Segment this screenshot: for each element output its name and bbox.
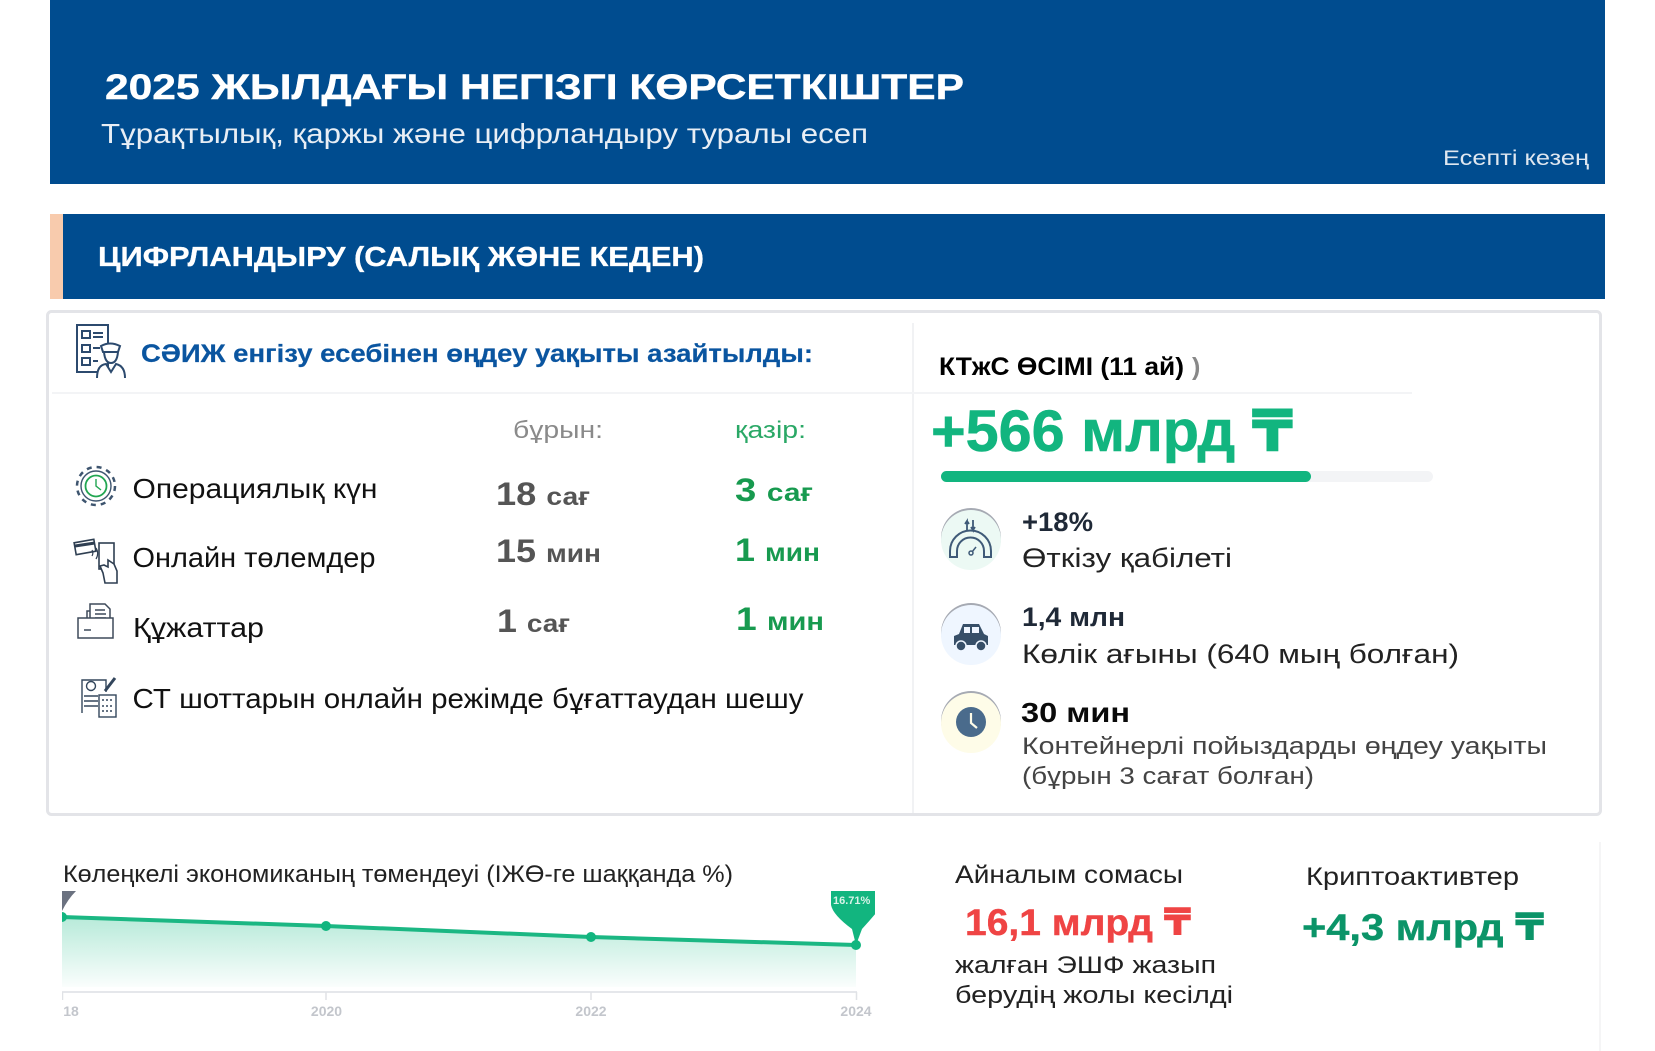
value now: 1 minute: 1 мин — [735, 532, 820, 568]
row label: operational day: Операциялық күн — [132, 473, 378, 504]
stat: traffic value: 1,4 млн — [1022, 602, 1125, 632]
stat: crypto assets: +4,3 млрд ₸ — [1302, 907, 1544, 948]
stat: turnover: 16,1 млрд ₸ — [965, 902, 1191, 943]
big number: +566 млрд ₸ — [931, 399, 1293, 464]
stat: crypto assets: Криптоактивтер — [1306, 863, 1519, 891]
x axis labels: 2022 — [575, 1003, 607, 1019]
icon: card and phone payment — [74, 539, 117, 583]
row label: online payments: Онлайн төлемдер — [132, 542, 376, 573]
title: 2025 ЖЫЛДАҒЫ НЕГІЗГІ КӨРСЕТКІШТЕР — [105, 68, 964, 107]
value now: 1 minute: 1 мин — [736, 601, 824, 637]
x axis labels — [64, 1006, 872, 1016]
header banner — [50, 0, 1605, 184]
stat: container time note: (бұрын 3 сағат болған) — [1022, 763, 1314, 790]
stat: traffic label: Көлік ағыны (640 мың болған) — [1022, 639, 1459, 669]
reporting period label: Есепті кезең — [1443, 147, 1589, 170]
row label: documents: Құжаттар — [133, 612, 264, 643]
stat: turnover — [955, 861, 1233, 1009]
stat: turnover: жалған ЭШФ жазып — [955, 952, 1216, 979]
icon: gear clock — [77, 467, 115, 505]
icon: invoice and calculator — [82, 678, 116, 717]
column label: now: қазір: — [735, 417, 806, 444]
x axis labels: 18 — [63, 1003, 79, 1019]
icon: inspector checklist — [77, 325, 125, 378]
panel: processing time — [74, 325, 824, 717]
stat: container time value: 30 мин — [1021, 697, 1130, 728]
icon: clock — [941, 691, 1001, 753]
stat: container time label: Контейнерлі пойыздарды өңдеу уақыты — [1022, 733, 1547, 760]
marker: start pin — [62, 891, 76, 911]
icon: documents folder — [78, 604, 113, 638]
section heading bar: ЦИФРЛАНДЫРУ (САЛЫҚ ЖӘНЕ КЕДЕН) — [98, 241, 704, 272]
panel heading: КТжС ӨСІМІ (11 ай) — [939, 353, 1184, 381]
progress bar — [941, 471, 1433, 482]
x axis labels: 2020 — [311, 1003, 342, 1019]
area line chart — [57, 891, 881, 1019]
stat: capacity label: Өткізу қабілеті — [1022, 543, 1232, 573]
panel: railway growth — [931, 353, 1547, 790]
panel heading: СӘИЖ енгізу есебінен өңдеу уақыты азайтылды: — [141, 340, 813, 368]
chart title: Көлеңкелі экономиканың төмендеуі (ІЖӨ-ге шаққанда %) — [63, 861, 733, 888]
main card — [48, 312, 1600, 814]
section heading bar — [50, 214, 1605, 299]
value before: 18 hours: 18 сағ — [496, 476, 590, 512]
stat: crypto assets — [1302, 863, 1544, 948]
value before: 1 hour: 1 сағ — [497, 603, 570, 639]
value before: 15 minutes: 15 мин — [496, 533, 601, 569]
stat: turnover: берудің жолы кесілді — [955, 982, 1233, 1009]
x axis labels: 2024 — [840, 1003, 872, 1019]
marker: end pin — [831, 891, 875, 940]
icon: car — [941, 603, 1001, 665]
column label: before: бұрын: — [513, 417, 603, 444]
icon: speedometer — [941, 508, 1001, 570]
stat: capacity value: +18% — [1022, 507, 1093, 537]
value now: 3 hours: 3 сағ — [735, 472, 813, 508]
marker: end pin: 16.71% — [833, 895, 871, 907]
stat: turnover: Айналым сомасы — [955, 861, 1183, 889]
stray bracket: ) — [1192, 353, 1200, 381]
subtitle: Тұрақтылық, қаржы және цифрландыру туралы есеп — [101, 118, 868, 149]
row label: unblocking accounts: СТ шоттарын онлайн режімде бұғаттаудан шешу — [132, 683, 804, 714]
